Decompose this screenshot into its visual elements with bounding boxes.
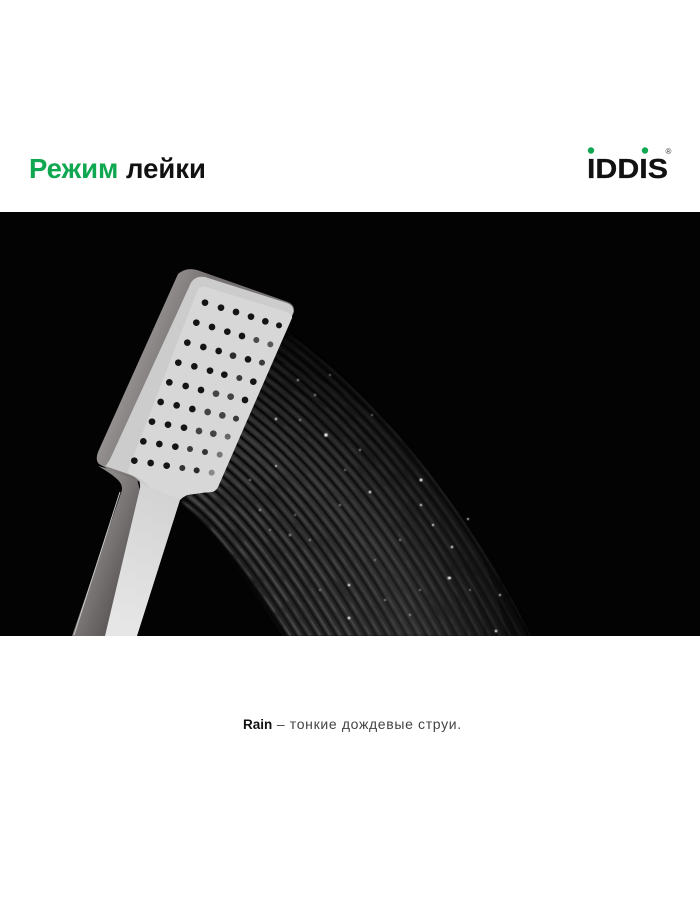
dark gaps between jets bbox=[181, 336, 528, 638]
photo: shower head with rain water jets bbox=[0, 212, 700, 636]
shower head bbox=[72, 269, 294, 636]
water droplets bbox=[249, 374, 501, 632]
head side bbox=[97, 269, 294, 493]
handle edge highlight bbox=[74, 492, 120, 635]
head face bbox=[128, 287, 292, 499]
head rim bbox=[105, 277, 293, 499]
water jets bbox=[183, 333, 530, 635]
water haze bbox=[183, 333, 530, 640]
handle side bbox=[72, 466, 140, 636]
logo: IDDIS: ® bbox=[666, 147, 672, 156]
logo: IDDIS: IDDIS bbox=[587, 153, 668, 184]
photo background bbox=[0, 212, 700, 636]
handle face bbox=[105, 464, 193, 636]
nozzle grid bbox=[131, 299, 282, 476]
title: Режим лейки bbox=[29, 153, 206, 184]
caption: Rain – тонкие дождевые струи. bbox=[243, 716, 462, 732]
